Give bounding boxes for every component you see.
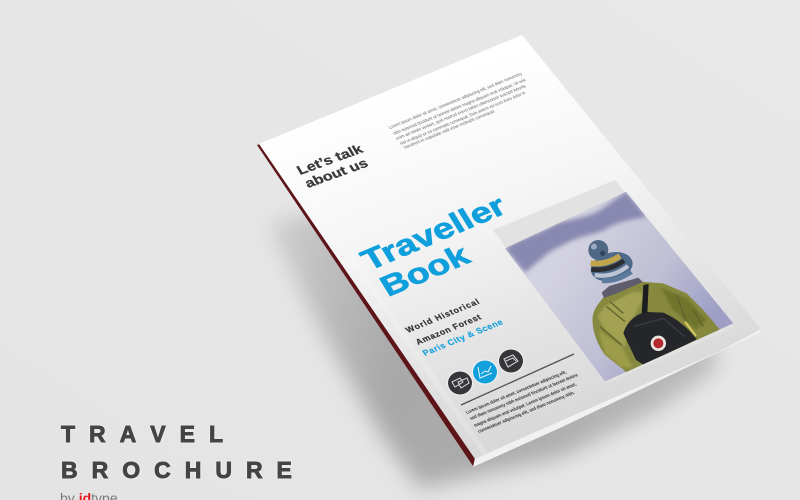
text block: footer lorem: consectetuer adipiscing elit, sed diam nonummy nibh.	[477, 390, 577, 435]
icon: brochure pages	[447, 370, 473, 396]
photo panel	[493, 180, 735, 384]
sky	[505, 192, 733, 382]
heading: Let's talk about us	[294, 141, 371, 191]
pack logo	[651, 336, 666, 351]
text block: intro lorem: enim ad minim veniam, quis nostrud exerci tation ullamcorper suscipit lobortis	[395, 83, 528, 141]
divider rule	[461, 354, 574, 405]
topics list: World Historical	[403, 297, 481, 335]
page thickness	[473, 329, 761, 467]
topics list	[403, 297, 505, 358]
text block: footer lorem: magna aliquam erat volutpat. Lorem ipsum dolor sit amet,	[473, 382, 578, 429]
icon: tray	[498, 348, 524, 374]
backpack	[623, 312, 697, 365]
caption: Travel Brochure by idtype: BROCHURE	[61, 457, 306, 483]
caption: Travel Brochure by idtype	[60, 421, 306, 500]
title: Traveller Book: Book	[374, 239, 476, 303]
heading: Let's talk about us: Let’s talk	[294, 141, 366, 178]
title: Traveller Book	[355, 190, 512, 303]
text block: footer lorem: Lorem ipsum dolor sit amet, consectetuer adipiscing elit,	[465, 369, 569, 416]
title: Traveller Book: Traveller	[355, 190, 512, 277]
jacket folds	[600, 295, 703, 345]
text block: intro lorem: nisl ut aliquip ex ea commodo consequat. Duis autem vel eum iriure dolor in	[399, 90, 527, 146]
cloud band	[505, 192, 647, 273]
collar	[602, 278, 643, 298]
text block: footer lorem: sed diam nonummy nibh euismod tincidunt ut laoreet dolore	[469, 373, 580, 422]
pack strap	[642, 284, 649, 314]
text block: intro lorem: nibh euismod tincidunt ut laoreet dolore magna aliquam erat volutpat. Ut wisi	[392, 77, 527, 136]
text block: intro lorem: Lorem ipsum dolor sit amet, consectetuer adipiscing elit, sed diam nonummy	[388, 71, 523, 130]
spine crease	[268, 138, 488, 456]
book shadow	[268, 200, 718, 488]
icon: line chart	[472, 360, 498, 384]
jacket zip highlight	[685, 322, 696, 336]
beanie	[587, 240, 636, 286]
heading: Let's talk about us: about us	[302, 156, 371, 191]
jacket	[592, 282, 720, 372]
cover	[259, 35, 761, 459]
caption: Travel Brochure by idtype: TRAVEL	[61, 421, 237, 447]
topics list: Amazon Forest	[413, 312, 483, 347]
photo: traveller from behind	[505, 192, 733, 383]
text block: intro lorem: hendrerit in vulputate velit esse molestie consequat.	[403, 108, 496, 150]
spine edge	[257, 144, 476, 466]
topics list: Paris City & Scene	[420, 317, 505, 358]
brochure book	[257, 35, 761, 467]
icon row	[447, 348, 524, 396]
pompom	[588, 240, 608, 260]
text block: footer lorem	[465, 369, 580, 435]
